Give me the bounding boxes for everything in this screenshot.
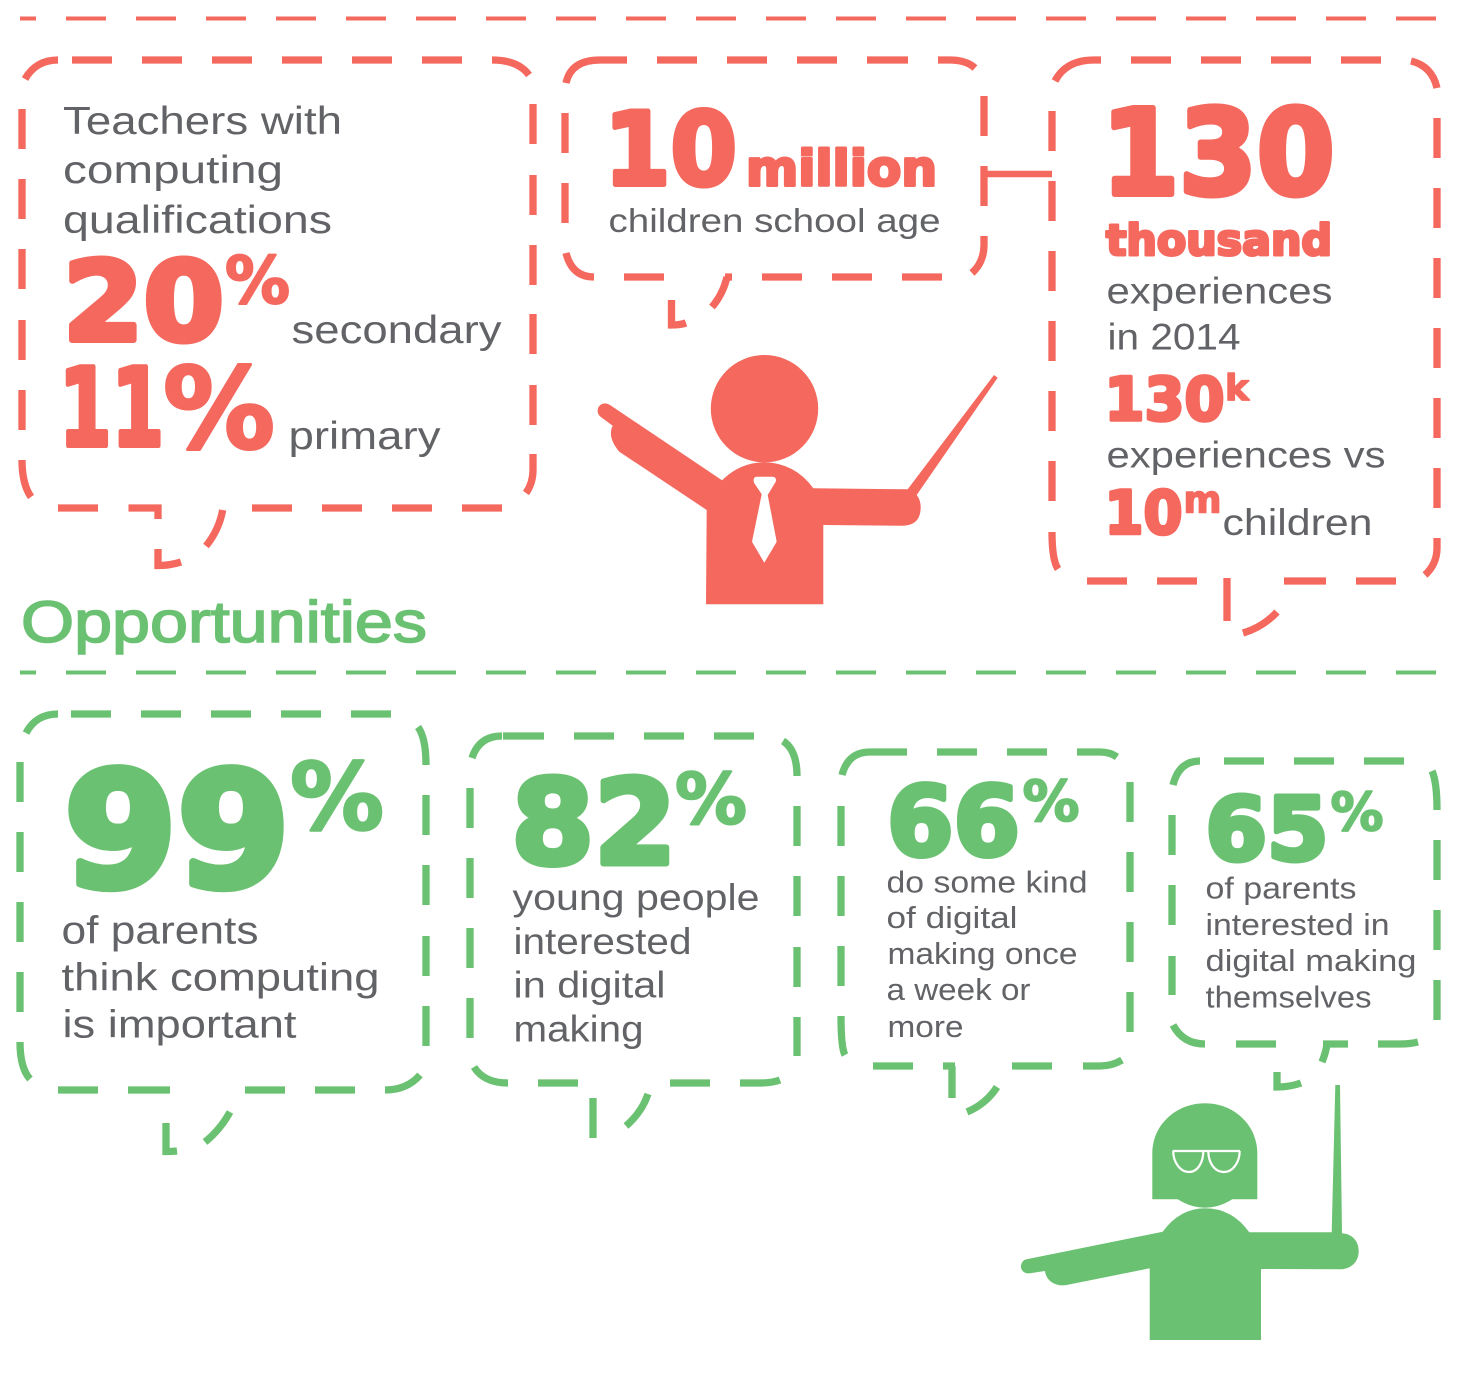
- heading: teachers with computing qualifications: [63, 100, 342, 242]
- stat: 11% primary: [59, 345, 441, 475]
- stat: 66%: 66: [887, 766, 1020, 878]
- caption: do some kind of digital making once a week or more: making once: [888, 936, 1078, 971]
- teacher head: [711, 355, 818, 462]
- speech bubble outline: 66%: [841, 752, 1130, 1112]
- stat: 65%: %: [1330, 782, 1384, 844]
- panel: 130 thousand experiences: [1052, 60, 1437, 633]
- caption: of parents interested in digital making themselves: [1206, 870, 1416, 1014]
- teacher tie: [752, 477, 777, 563]
- caption: experiences vs: experiences vs: [1106, 434, 1386, 476]
- caption: of parents think computing is important: of parents: [62, 910, 258, 952]
- stat: 65%: [1206, 779, 1384, 881]
- caption: children: children: [1222, 502, 1372, 543]
- connector between bubbles: [984, 171, 1052, 177]
- caption: do some kind of digital making once a week or more: do some kind: [886, 864, 1088, 900]
- icon: female teacher with pointer: [1021, 1085, 1359, 1340]
- stat: 66%: [887, 766, 1080, 878]
- caption: of parents interested in digital making themselves: interested in: [1206, 907, 1390, 942]
- caption: experiences in 2014: [1106, 270, 1332, 358]
- stat: 99%: %: [290, 743, 384, 851]
- caption: of parents think computing is important: [62, 910, 380, 1046]
- stat: 10 million: [604, 90, 937, 208]
- caption: of parents interested in digital making themselves: themselves: [1206, 980, 1372, 1014]
- caption: of parents think computing is important: think computing: [62, 956, 380, 1000]
- speech bubble outline: 82%: [470, 736, 797, 1138]
- caption: do some kind of digital making once a week or more: more: [888, 1009, 964, 1044]
- glasses: [1173, 1151, 1240, 1172]
- speech bubble outline: 130 thousand: [1052, 60, 1437, 633]
- caption: of parents interested in digital making themselves: of parents: [1206, 870, 1356, 906]
- teacher body, arms and pointer: [598, 375, 998, 604]
- stat: 99%: 99: [64, 739, 290, 924]
- caption: experiences in 2014: in 2014: [1108, 316, 1240, 358]
- caption: young people interested in digital making: [512, 877, 760, 1050]
- stat: 66%: %: [1022, 770, 1080, 834]
- panel: 10 million children school age: [565, 60, 984, 325]
- caption: children school age: children school age: [608, 202, 940, 239]
- caption: young people interested in digital making: young people: [512, 877, 760, 918]
- heading: teachers with computing qualifications: qualifications: [63, 199, 332, 242]
- panel: 99% of parents: [20, 714, 426, 1152]
- speech bubble outline: 99%: [20, 714, 426, 1152]
- speech bubble outline: 10 million: [565, 60, 984, 325]
- speech bubble outline: teachers: [22, 60, 533, 566]
- icon: male teacher with pointer: [598, 355, 998, 604]
- stat: 20% secondary: [63, 238, 502, 366]
- stat: 11% primary: %: [163, 345, 275, 475]
- stat: 11% primary: primary: [288, 415, 441, 458]
- stat: 10m: 10: [1104, 478, 1182, 548]
- body, arms and pointer: [1021, 1085, 1359, 1340]
- stat: 82%: 82: [512, 755, 676, 892]
- stat: 10 million: 10: [604, 90, 737, 208]
- heading: Opportunities: Opportunities: [21, 590, 427, 655]
- panel: 82% young people: [470, 736, 797, 1138]
- stat: 130k: 130: [1104, 365, 1224, 435]
- stat: 82%: [512, 755, 747, 892]
- stat: 130: 130: [1102, 84, 1334, 222]
- caption: do some kind of digital making once a week or more: [886, 864, 1088, 1044]
- caption: experiences in 2014: experiences: [1106, 270, 1332, 312]
- heading: teachers with computing qualifications: computing: [63, 149, 283, 192]
- caption: do some kind of digital making once a week or more: of digital: [886, 900, 1018, 935]
- caption: young people interested in digital making: interested: [514, 921, 692, 962]
- stat: 11% primary: 11: [59, 346, 164, 472]
- caption: do some kind of digital making once a week or more: a week or: [886, 972, 1030, 1007]
- stat: 130k: k: [1225, 368, 1250, 409]
- caption: young people interested in digital making: in digital: [514, 965, 666, 1006]
- heading: teachers with computing qualifications: Teachers with: [63, 100, 342, 143]
- caption: of parents think computing is important: is important: [62, 1004, 297, 1046]
- stat: 99%: [64, 739, 384, 924]
- caption: young people interested in digital making: making: [514, 1009, 644, 1050]
- stat: 65%: 65: [1206, 779, 1328, 881]
- speech bubble outline: 65%: [1172, 761, 1437, 1087]
- stat: 20% secondary: secondary: [292, 309, 502, 352]
- stat: 20% secondary: 20: [63, 238, 224, 366]
- stat: 20% secondary: %: [225, 244, 290, 319]
- panel: teachers with computing qualifications: [22, 60, 533, 566]
- caption: of parents interested in digital making themselves: digital making: [1206, 943, 1416, 978]
- stat: 10m: m: [1184, 478, 1222, 522]
- panel: 65% of parents interested: [1172, 761, 1437, 1087]
- stat unit: thousand: thousand: [1106, 216, 1332, 266]
- stat: 10 million: million: [746, 140, 937, 198]
- student head with hair: [1152, 1103, 1257, 1208]
- stat: 82%: %: [675, 758, 747, 840]
- panel: 66% digital making weekly: [841, 752, 1130, 1112]
